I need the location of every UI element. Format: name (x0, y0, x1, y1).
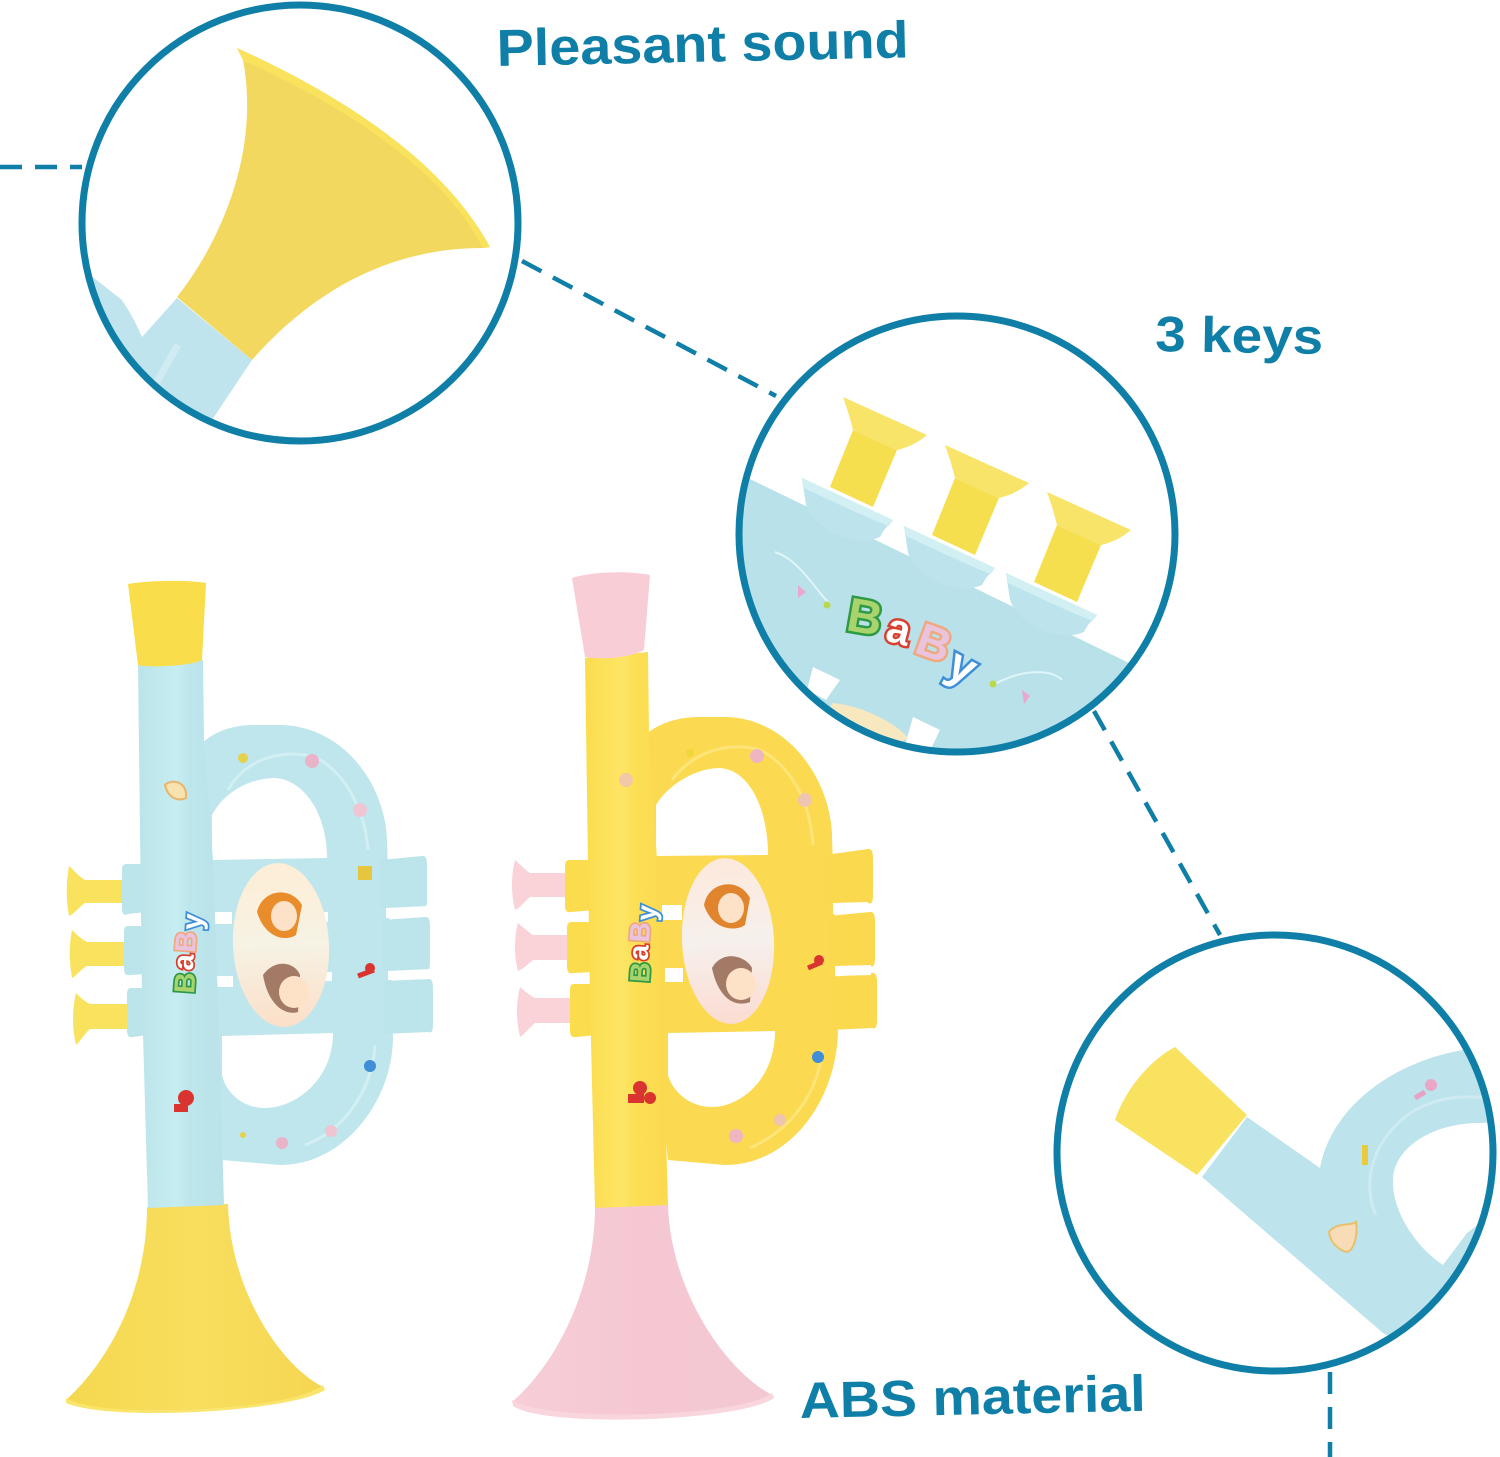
yellow mouthpiece (1115, 1047, 1247, 1175)
BaBy label: a (168, 952, 201, 971)
valve gaps (662, 902, 871, 982)
right valve stubs (825, 849, 873, 905)
left valve stubs (565, 860, 595, 912)
callout circle: trumpet bell close-up (82, 5, 518, 441)
BaBy label: B (169, 971, 202, 994)
dashed connector lines (0, 167, 1330, 1457)
main tube (138, 660, 224, 1208)
music staff swirls (775, 552, 1062, 684)
loop highlights (228, 754, 375, 1145)
oval sticker (678, 856, 778, 1026)
white notches (807, 667, 940, 755)
bell (512, 1204, 772, 1417)
callout circle: three keys close-up (730, 316, 1180, 770)
BaBy label: y (939, 637, 987, 695)
right valve stubs (380, 856, 427, 909)
key 3 (1006, 492, 1131, 635)
key 2 (904, 445, 1029, 588)
loop highlights (672, 747, 822, 1148)
sticker hint (830, 703, 908, 742)
main tube (585, 652, 668, 1208)
lower hole (668, 1031, 775, 1107)
BaBy label (166, 912, 210, 995)
BaBy label: y (630, 904, 662, 922)
upper hole (212, 778, 327, 860)
bell (66, 1204, 323, 1411)
heading: 3 keys: 3 keys (1155, 306, 1324, 365)
BaBy label: B (624, 961, 656, 983)
lower hole (222, 1033, 333, 1108)
BaBy label: a (623, 943, 655, 961)
left valve stubs (122, 864, 146, 915)
BaBy label: a (882, 603, 917, 655)
BaBy label: B (843, 589, 886, 647)
valve gaps (215, 906, 431, 987)
yellow bell (177, 48, 490, 360)
callout circle: mouthpiece close-up (1057, 935, 1500, 1400)
blue trumpet (66, 581, 433, 1413)
heading: ABS material: ABS material (799, 1365, 1146, 1429)
bell rim (237, 48, 490, 248)
decals (619, 773, 633, 787)
loop and valve block (200, 725, 393, 1165)
BaBy label: B (910, 613, 959, 673)
decals (165, 782, 186, 799)
upper hole (656, 768, 768, 856)
bell rim (66, 1385, 325, 1413)
keys left (512, 860, 570, 910)
decals (1329, 1222, 1357, 1252)
oval sticker (229, 861, 333, 1029)
keys left (67, 866, 122, 916)
BaBy label: B (170, 930, 203, 953)
mouthpiece (572, 572, 650, 658)
BaBy label (845, 595, 982, 689)
ring highlight (1370, 1097, 1490, 1215)
trumpet body (742, 479, 1128, 748)
BaBy label (621, 903, 662, 984)
loop and valve block (645, 717, 838, 1165)
BaBy label: B (624, 921, 656, 943)
inner hole of loop (1393, 1122, 1490, 1265)
blue tube and loop (1202, 1050, 1488, 1336)
key 1 (802, 397, 927, 540)
yellow trumpet (512, 572, 877, 1420)
mouthpiece (128, 581, 206, 666)
heading: Pleasant sound: Pleasant sound (496, 11, 909, 78)
BaBy label: y (177, 913, 210, 931)
bell rim (512, 1393, 774, 1420)
blue tube segment (90, 275, 252, 420)
